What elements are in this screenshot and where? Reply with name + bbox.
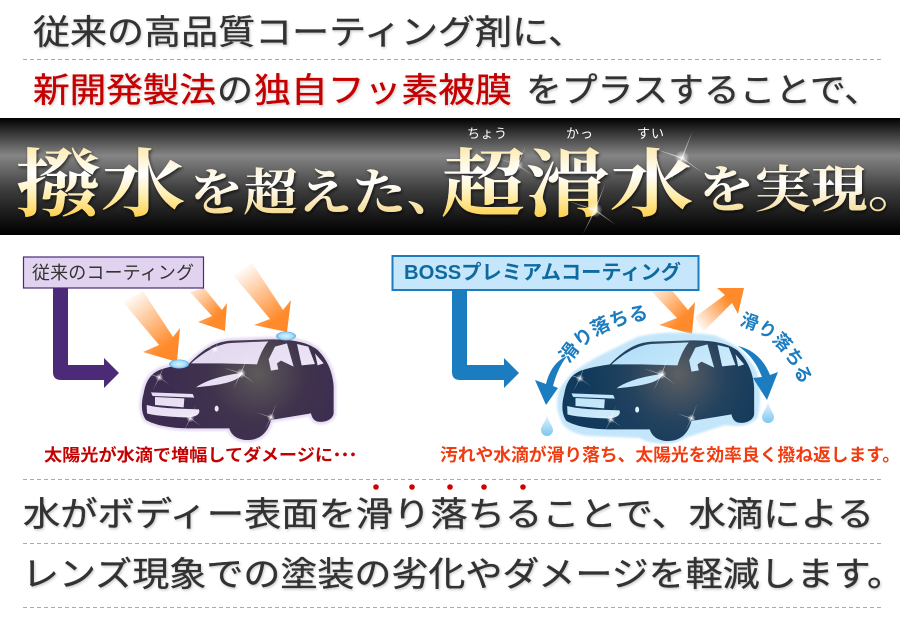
- label: BOSSプレミアムコーティング: [392, 256, 698, 290]
- orange sun arrows: [123, 263, 291, 362]
- water droplets: [169, 332, 296, 368]
- panel: BOSS premium coating: [392, 255, 900, 465]
- car: dark purple: [142, 337, 334, 440]
- title sparkles: [498, 131, 703, 234]
- label: 従来のコーティング: 従来のコーティング: [32, 263, 194, 283]
- left falling drop: [541, 415, 553, 436]
- body text line 2: レンズ現象での塗装の劣化やダメージを軽減します。: [22, 556, 900, 594]
- car: dark blue: [562, 340, 754, 441]
- body text line 1: 水がボディー表面を滑り落ちることで、水滴による: [23, 496, 874, 534]
- orange reflected arrow: [695, 288, 744, 333]
- intro text line 1: 従来の高品質コーティング剤に、: [33, 14, 585, 52]
- label: BOSSプレミアムコーティング: BOSSプレミアムコーティング: [404, 260, 681, 284]
- intro text line 2: [33, 72, 880, 110]
- right falling drop: [762, 402, 774, 423]
- curved text right: 滑り落ちる: [740, 311, 812, 382]
- orange incoming arrow: [650, 288, 695, 334]
- title: を実現。: を実現。: [698, 162, 900, 218]
- ruby: ちょう: ちょう: [467, 126, 507, 141]
- caption: benefit: 汚れや水滴が滑り落ち、太陽光を効率良く撥ね返します。: [440, 445, 900, 465]
- label: 従来のコーティング: [24, 257, 204, 288]
- ruby: すい: すい: [637, 126, 664, 141]
- caption: damage: ・・・: [330, 447, 356, 464]
- blue L arrow: [452, 285, 519, 388]
- title band: [0, 118, 900, 235]
- panel: conventional coating: [24, 257, 356, 465]
- purple L arrow: [53, 285, 119, 388]
- curved text left: 滑り落ちる: [558, 305, 646, 363]
- left curved arrow: [535, 356, 567, 405]
- intro text line 2: 独自フッ素被膜: [254, 72, 512, 110]
- intro text line 2: をプラスすることで、: [526, 72, 880, 110]
- intro text line 2: 新開発製法: [33, 72, 216, 110]
- title: 撥水: 撥水: [16, 145, 186, 227]
- caption: damage: 太陽光が水滴で増幅してダメージに: [44, 445, 333, 465]
- emphasis dots: [373, 484, 526, 490]
- intro text line 2: の: [217, 72, 253, 110]
- right curved arrow: [738, 346, 778, 400]
- title: 超滑水: 超滑水: [441, 145, 694, 227]
- title: を超えた、: を超えた、: [189, 165, 461, 221]
- water film halo: [557, 333, 760, 443]
- ruby: かっ: かっ: [566, 126, 593, 141]
